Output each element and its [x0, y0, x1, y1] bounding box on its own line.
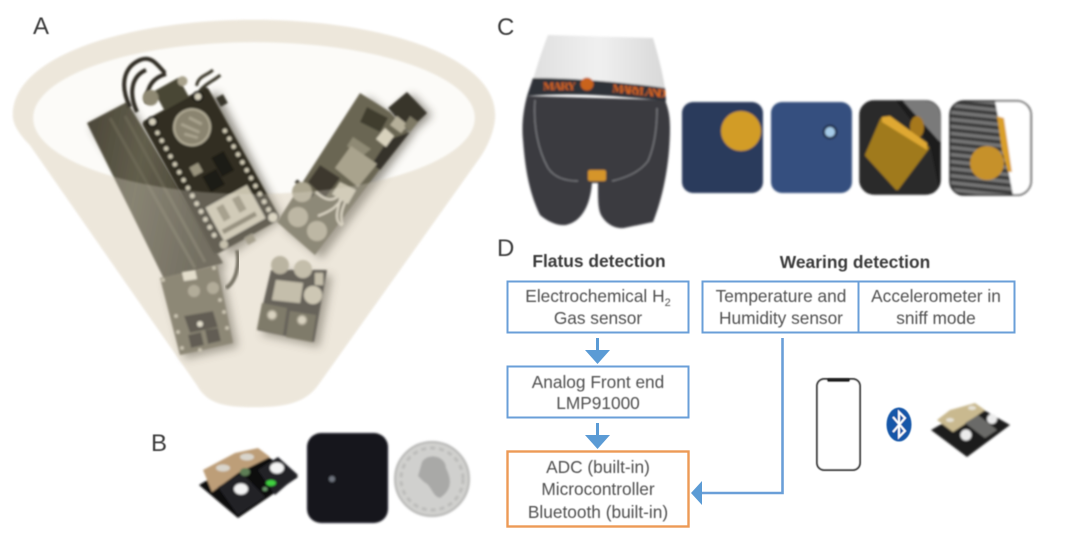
box: temperature and humidity sensor: Humidity sensor	[719, 308, 843, 328]
underwear on mannequin: MARYLAND	[612, 81, 667, 101]
box: microcontroller: Microcontroller	[541, 479, 655, 499]
translucent funnel overlay	[13, 20, 495, 407]
icon: bluetooth	[886, 408, 912, 442]
enclosure with sensor cap	[682, 102, 763, 193]
wearable enclosure photo	[307, 433, 388, 523]
arrow: wearing sensors to microcontroller	[691, 338, 782, 505]
box: accelerometer: sniff mode	[896, 308, 976, 328]
box: temperature and humidity sensor: Temperature and	[716, 286, 846, 306]
panel B: device size comparison	[151, 430, 469, 523]
bottom-left sensor board	[160, 265, 233, 355]
label A: A	[33, 13, 49, 40]
sensor cap on carbon fabric	[950, 101, 1031, 195]
bottom-right sensor board	[257, 256, 327, 342]
cable loop	[226, 250, 238, 288]
box: microcontroller	[508, 452, 688, 526]
box: analog front end: Analog Front end	[532, 372, 664, 392]
sensor cap angled view	[860, 101, 940, 194]
label C: C	[497, 14, 514, 41]
component shadows	[91, 92, 432, 359]
label D: D	[497, 235, 514, 262]
panel D: system block diagram	[497, 235, 1014, 526]
box: temperature and humidity sensor	[702, 282, 858, 332]
box: gas sensor: Electrochemical H	[525, 286, 665, 306]
box: analog front end: LMP91000	[556, 393, 640, 413]
underwear on mannequin	[522, 35, 670, 228]
box: gas sensor	[508, 282, 688, 332]
sensor module illustration	[931, 403, 1010, 457]
box: accelerometer	[858, 282, 1014, 332]
sensor module photo	[199, 448, 298, 518]
box: gas sensor: Gas sensor	[554, 308, 642, 328]
panel C: garment and enclosure photos	[497, 14, 1031, 228]
underwear on mannequin: MARY	[543, 79, 576, 93]
box: microcontroller: ADC (built-in)	[546, 457, 650, 477]
funnel background	[13, 20, 495, 407]
panel A: sensor components in a funnel	[13, 13, 495, 407]
battery	[87, 102, 223, 281]
box: accelerometer: Accelerometer in	[871, 286, 1001, 306]
quarter coin	[395, 442, 469, 516]
circuit board	[129, 56, 299, 261]
arrow: sensor to front end	[585, 338, 610, 364]
arrow: front end to microcontroller	[585, 423, 610, 449]
connecting wires	[124, 59, 166, 112]
box: microcontroller: Bluetooth (built-in)	[528, 502, 668, 522]
heading: flatus detection: Flatus detection	[532, 251, 666, 271]
gas sensor board	[277, 92, 427, 255]
box: analog front end	[508, 366, 688, 418]
enclosure with gas hole	[771, 102, 852, 193]
box: gas sensor: 2	[665, 297, 671, 309]
icon: smartphone	[817, 378, 860, 470]
microcontroller board	[124, 56, 299, 261]
label B: B	[151, 430, 167, 457]
heading: wearing detection: Wearing detection	[780, 252, 930, 272]
